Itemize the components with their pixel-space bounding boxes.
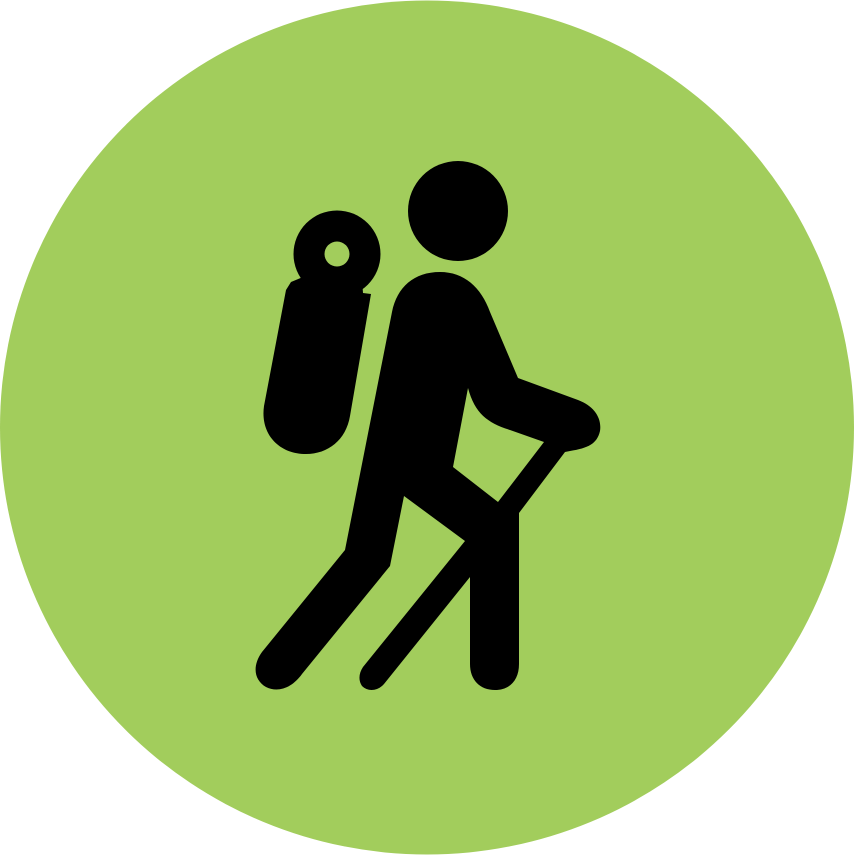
body, legs, arm and trekking pole [256,272,600,690]
head [408,161,508,261]
backpack bedroll [263,210,380,454]
hiker figure [256,161,600,690]
